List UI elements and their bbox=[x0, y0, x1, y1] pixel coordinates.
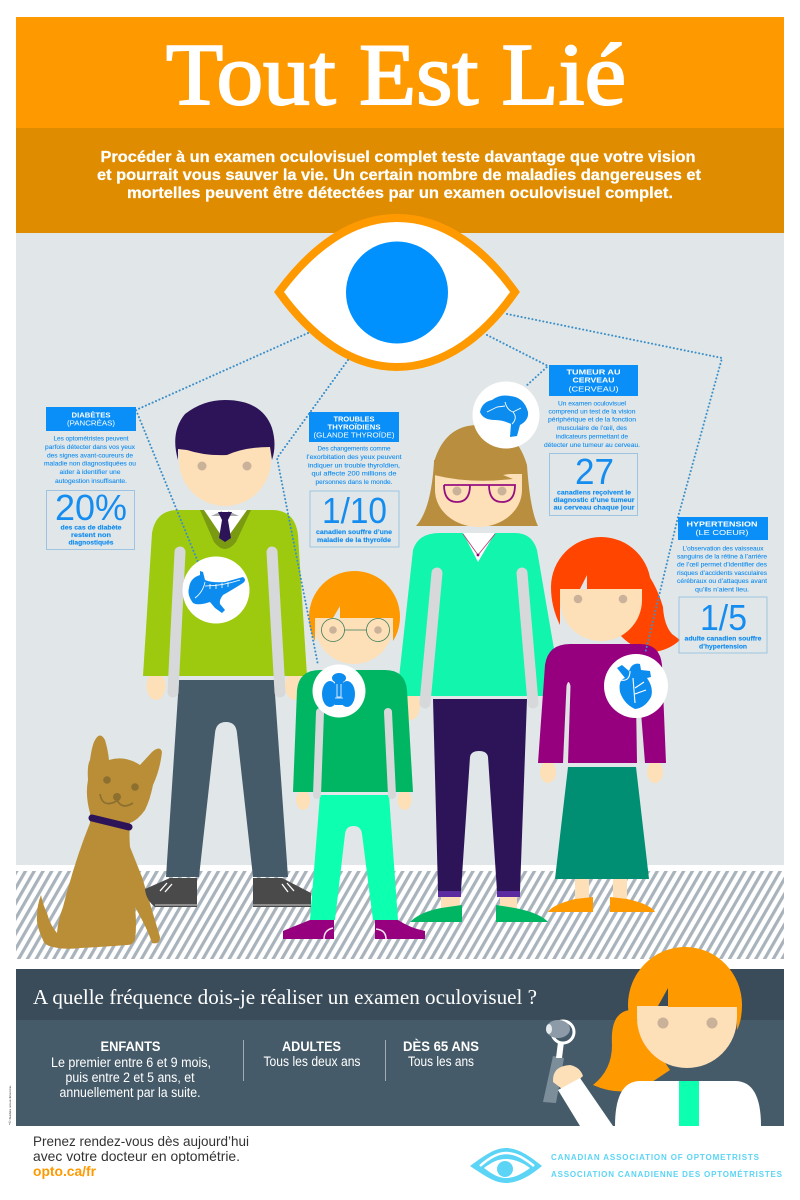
thyroid text: qui affecte 200 millions de bbox=[312, 470, 397, 478]
hypertension statistic: 1/5 bbox=[700, 597, 747, 638]
icon: large eye bbox=[279, 218, 515, 367]
thyroid heading: THYROÏDIENS bbox=[328, 422, 380, 432]
thyroid text: personnes dans le monde. bbox=[316, 479, 393, 486]
tumour heading: CERVEAU bbox=[572, 376, 615, 384]
hypertension text: L’observation des vaisseaux bbox=[682, 546, 764, 552]
panel: diabetes bbox=[44, 407, 136, 550]
figure: dog bbox=[37, 736, 162, 949]
figure: boy bbox=[283, 571, 425, 939]
thyroid heading: TROUBLES bbox=[334, 414, 374, 424]
tumour text: comprend un test de la vision bbox=[548, 408, 636, 416]
hypertension statistic bbox=[679, 597, 767, 653]
tumour statistic: canadiens reçoivent le bbox=[557, 490, 631, 496]
icon: heart bbox=[604, 654, 668, 718]
diabetes text: parfois détecter dans vos yeux bbox=[45, 444, 136, 451]
boy shoes bbox=[283, 920, 334, 939]
tumour text: détecter une tumeur au cerveau. bbox=[544, 442, 640, 449]
background wall bbox=[16, 233, 784, 865]
hypertension heading: HYPERTENSION bbox=[686, 520, 758, 528]
column: children: puis entre 2 et 5 ans, et bbox=[66, 1070, 195, 1085]
small credit text: *© Gérés sous licence. bbox=[8, 1085, 12, 1125]
tumour statistic: diagnostic d’une tumeur bbox=[554, 497, 635, 504]
man shoes bbox=[145, 878, 311, 907]
column: adults: ADULTES bbox=[282, 1039, 341, 1054]
tumour text: musculaire de l’œil, des bbox=[557, 425, 628, 432]
logo: Canadian Association of Optometrists: ASSOCIATION CANADIENNE DES OPTOMÉTRISTES bbox=[551, 1170, 783, 1179]
panel: thyroid bbox=[306, 412, 402, 547]
woman sweater bbox=[397, 533, 562, 696]
tumour text bbox=[544, 400, 640, 449]
woman shoes and legs bbox=[410, 699, 548, 922]
tumour text: périphérique et de la fonction bbox=[548, 416, 636, 424]
girl legs and shoes bbox=[575, 879, 589, 900]
tumour statistic: au cerveau chaque jour bbox=[554, 504, 635, 512]
intro panel: et pourrait vous sauver la vie. Un certain nombre de maladies dangereuses et bbox=[97, 167, 701, 184]
figure: girl bbox=[538, 537, 680, 912]
hypertension text: qu’ils n’aient lieu. bbox=[695, 586, 749, 594]
thyroid heading bbox=[309, 412, 399, 442]
diabetes text: Les optométristes peuvent bbox=[54, 436, 129, 442]
diabetes heading bbox=[46, 407, 136, 431]
column: adults: Tous les deux ans bbox=[264, 1054, 361, 1069]
panel: brain tumour bbox=[544, 365, 640, 516]
diabetes text: aider à identifier une bbox=[60, 469, 121, 476]
hypertension heading: (LE COEUR) bbox=[696, 528, 749, 537]
panel: exam frequency bbox=[16, 969, 784, 1126]
diabetes text: maladie non diagnostiquées ou bbox=[44, 460, 136, 468]
column: children: Le premier entre 6 et 9 mois, bbox=[51, 1055, 211, 1070]
column: seniors bbox=[403, 1039, 479, 1069]
column: children bbox=[51, 1039, 211, 1100]
boy trousers bbox=[310, 795, 398, 920]
hypertension text: de l’œil permet d’identifier des bbox=[677, 562, 768, 568]
diabetes statistic bbox=[46, 487, 134, 550]
call to action bbox=[33, 1133, 249, 1179]
icon: brain bbox=[472, 382, 540, 448]
hypertension statistic: adulte canadien souffre bbox=[684, 636, 762, 642]
column: adults bbox=[264, 1039, 361, 1069]
figure: woman bbox=[397, 425, 562, 922]
man sweater bbox=[143, 510, 307, 676]
striped floor bbox=[16, 871, 784, 959]
girl skirt bbox=[555, 767, 649, 879]
call to action: Prenez rendez-vous dès aujourd’hui bbox=[33, 1133, 249, 1149]
thyroid text: Des changements comme bbox=[318, 446, 391, 452]
diabetes heading: (PANCRÉAS) bbox=[67, 418, 115, 428]
column: seniors: DÈS 65 ANS bbox=[403, 1039, 479, 1054]
tumour statistic bbox=[550, 451, 638, 516]
girl head bbox=[551, 537, 651, 641]
panel: hypertension bbox=[677, 517, 768, 653]
boy head bbox=[309, 571, 400, 664]
hypertension statistic: d’hypertension bbox=[699, 644, 747, 650]
thyroid heading: (GLANDE THYROÏDE) bbox=[314, 430, 395, 440]
logo: Canadian Association of Optometrists: CANADIAN ASSOCIATION OF OPTOMETRISTS bbox=[551, 1153, 760, 1162]
thyroid text bbox=[306, 446, 402, 486]
tumour statistic: 27 bbox=[575, 451, 614, 492]
dog collar bbox=[92, 818, 129, 827]
diabetes statistic: des cas de diabète bbox=[60, 524, 122, 532]
column: children: annuellement par la suite. bbox=[60, 1085, 200, 1100]
woman head bbox=[416, 425, 538, 527]
thyroid statistic bbox=[310, 490, 399, 547]
thyroid statistic: canadien souffre d’une bbox=[316, 529, 392, 536]
man trousers bbox=[166, 680, 288, 877]
figure: man bbox=[143, 400, 311, 907]
hypertension heading bbox=[678, 517, 768, 540]
diabetes text: autogestion insuffisante. bbox=[55, 478, 127, 485]
tumour heading bbox=[549, 365, 638, 396]
icon: thyroid bbox=[312, 664, 366, 718]
man head bbox=[175, 400, 274, 506]
title: Tout Est Lié bbox=[166, 27, 626, 124]
tumour heading: TUMEUR AU bbox=[566, 368, 621, 376]
diabetes statistic: diagnostiqués bbox=[68, 540, 114, 546]
icon: pancreas bbox=[182, 556, 250, 624]
thyroid statistic: 1/10 bbox=[322, 490, 387, 531]
thyroid text: l’exorbitation des yeux peuvent bbox=[306, 454, 402, 461]
intro panel: mortelles peuvent être détectées par un examen oculovisuel complet. bbox=[127, 185, 673, 202]
tumour text: Un examen oculovisuel bbox=[558, 400, 627, 408]
hypertension text bbox=[677, 546, 768, 594]
diabetes statistic: 20% bbox=[55, 487, 127, 528]
hypertension text: risques d’accidents vasculaires bbox=[677, 570, 768, 577]
column: children: ENFANTS bbox=[100, 1039, 160, 1054]
otoscope bbox=[543, 1020, 574, 1103]
hypertension text: cérébraux ou d’attaques avant bbox=[677, 578, 767, 585]
diabetes statistic: restent non bbox=[71, 532, 111, 539]
logo: Canadian Association of Optometrists bbox=[470, 1148, 783, 1183]
tumour text: indicateurs permettant de bbox=[556, 434, 628, 440]
title banner bbox=[16, 17, 784, 129]
frequency heading: A quelle fréquence dois-je réaliser un examen oculovisuel ? bbox=[33, 985, 537, 1009]
girl sweater bbox=[538, 644, 666, 763]
diabetes text: des signes avant-coureurs de bbox=[47, 452, 133, 460]
boy sweater bbox=[293, 670, 413, 792]
hypertension text: sanguins de la rétine à l’arrière bbox=[677, 554, 767, 560]
call to action: opto.ca/fr bbox=[33, 1163, 97, 1179]
tumour heading: (CERVEAU) bbox=[568, 384, 619, 394]
girl ponytail bbox=[620, 565, 680, 652]
intro panel: Procéder à un examen oculovisuel complet teste davantage que votre vision bbox=[100, 149, 696, 166]
diabetes heading: DIABÈTES bbox=[72, 410, 110, 420]
intro panel bbox=[16, 128, 784, 233]
thyroid text: indiquer un trouble thyroïdien, bbox=[308, 462, 400, 470]
figure: optometrist bbox=[543, 947, 761, 1126]
dotted connector lines bbox=[136, 314, 722, 665]
call to action: avec votre docteur en optométrie. bbox=[33, 1148, 240, 1164]
column: seniors: Tous les ans bbox=[408, 1054, 474, 1069]
diabetes text bbox=[44, 436, 136, 485]
thyroid statistic: maladie de la thyroïde bbox=[317, 537, 391, 544]
